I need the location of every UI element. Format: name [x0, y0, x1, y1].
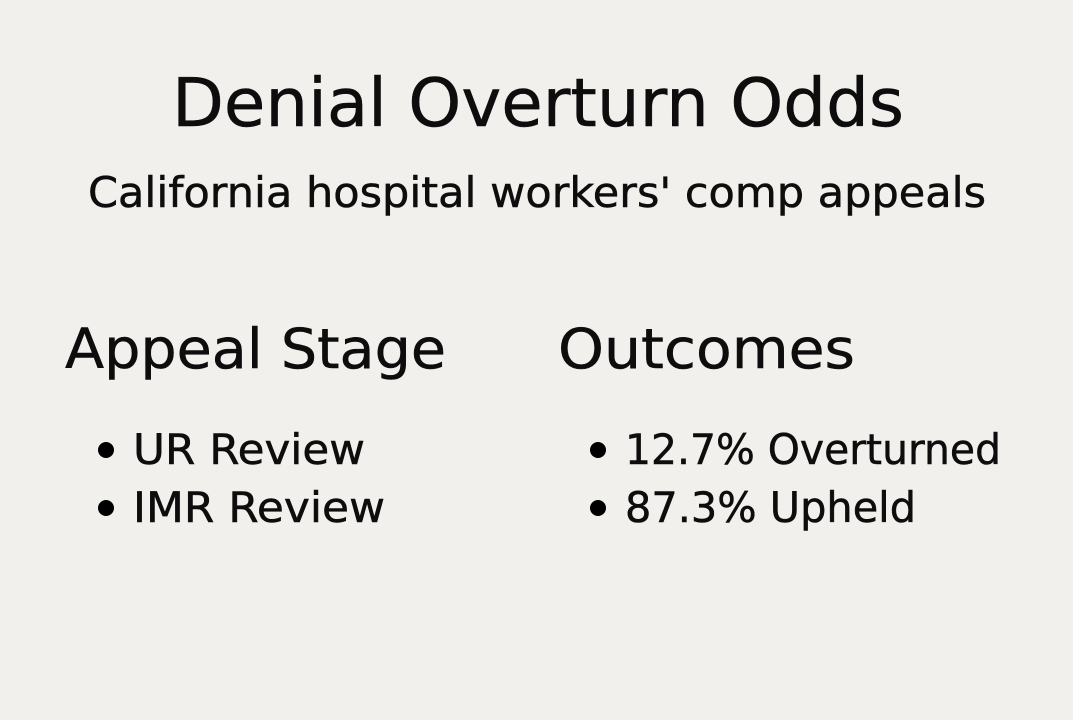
list item: UR review: UR Review [133, 425, 365, 474]
panel: outcomes [558, 317, 1001, 532]
list item: overturned share: 12.7% Overturned [625, 425, 1001, 474]
subtitle: California hospital workers' comp appeals [88, 168, 986, 217]
heading: appeal stage: Appeal Stage [65, 317, 446, 381]
title: Denial Overturn Odds [172, 64, 904, 142]
panel: appeal stage [65, 317, 446, 532]
list item: upheld share: 87.3% Upheld [625, 483, 916, 532]
list item: IMR review: IMR Review [133, 483, 385, 532]
heading: outcomes: Outcomes [558, 317, 855, 381]
